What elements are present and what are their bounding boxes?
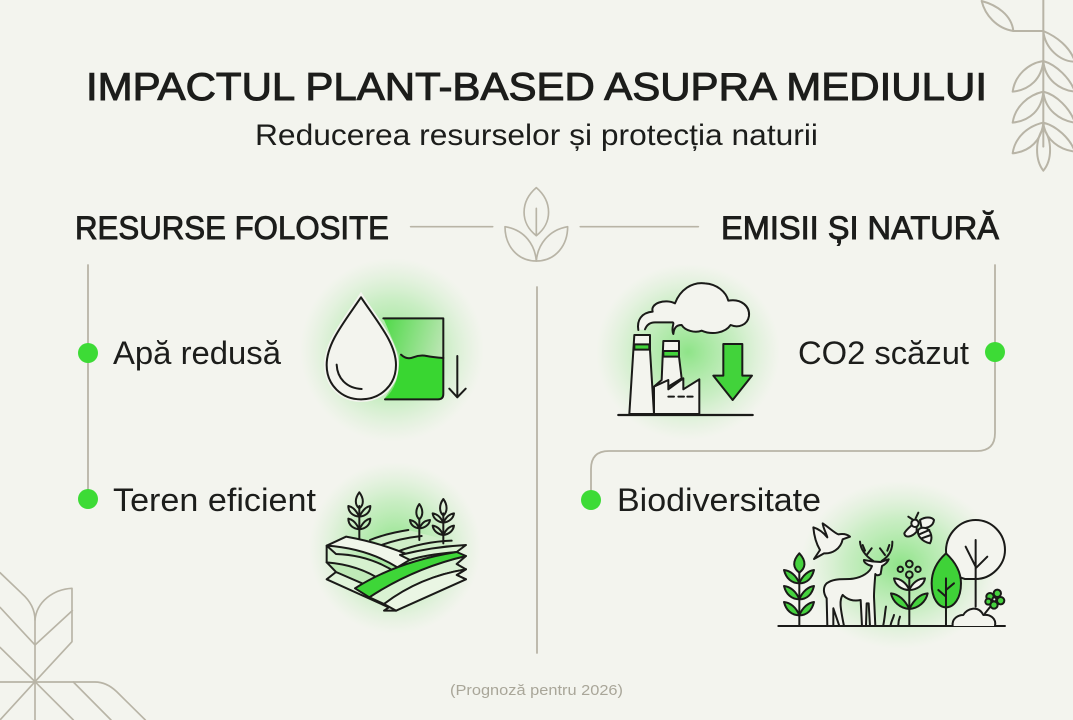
bullet — [78, 489, 98, 509]
icon: nature scene with deer, bird, bee, trees — [778, 481, 1005, 649]
subtitle: Reducerea resurselor și protecția naturii — [255, 119, 818, 152]
label: Biodiversitate — [617, 482, 821, 518]
label: Teren eficient — [113, 482, 316, 518]
section heading: resources: RESURSE FOLOSITE — [75, 210, 389, 246]
item: lower CO2 — [798, 335, 1005, 371]
center divider line — [536, 287, 538, 653]
item: biodiversity — [581, 482, 821, 518]
item: water reduced — [78, 335, 281, 371]
footnote: (Prognoză pentru 2026) — [450, 682, 623, 699]
section heading: emissions: EMISII ȘI NATURĂ — [721, 210, 1000, 246]
left connector line — [87, 265, 89, 499]
bullet — [985, 342, 1005, 362]
label: Apă redusă — [113, 335, 281, 371]
bullet — [581, 490, 601, 510]
right connector line — [591, 265, 995, 499]
icon: water drop and beaker — [300, 258, 484, 442]
item: efficient land — [78, 482, 316, 518]
title: IMPACTUL PLANT-BASED ASUPRA MEDIULUI — [86, 66, 987, 109]
decoration: top right branch — [982, 0, 1073, 171]
icon: fields and wheat — [309, 462, 481, 634]
divider icon: central leaf — [411, 188, 698, 261]
back hills — [370, 530, 453, 557]
icon: factory, cloud, down arrow — [596, 264, 780, 440]
decoration: bottom left leaf — [0, 573, 145, 720]
bullet — [78, 343, 98, 363]
label: CO2 scăzut — [798, 335, 969, 371]
